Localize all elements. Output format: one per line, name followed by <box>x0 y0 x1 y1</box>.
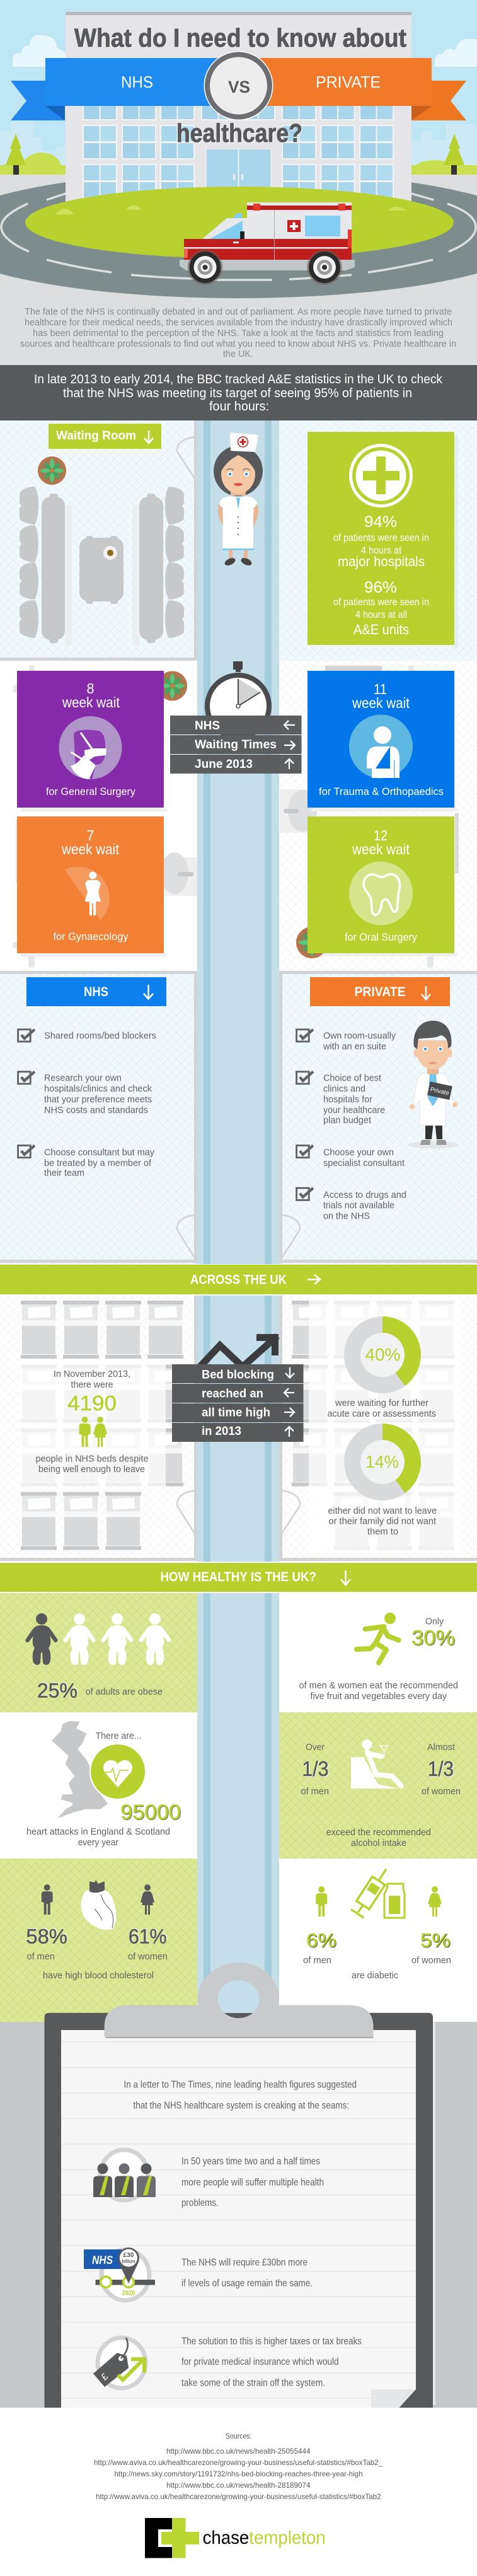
item: 30bn funding gap <box>84 2248 313 2300</box>
statistic: 4190 people in NHS beds: people in NHS beds despite <box>35 1453 149 1464</box>
statistic: A&E units: 96% <box>364 579 397 596</box>
letter intro <box>124 2079 357 2111</box>
item: 30bn funding gap: if levels of usage remain the same. <box>181 2278 313 2289</box>
band: across the UK: ACROSS THE UK <box>190 1272 287 1287</box>
item: research hospitals: Research your own <box>44 1073 122 1084</box>
statistic: alcohol intake <box>301 1739 461 1848</box>
card: general surgery wait: week wait <box>62 694 120 711</box>
statistic: 4190 people in NHS beds: 4190 <box>67 1391 117 1415</box>
clouds <box>13 35 477 67</box>
card: A&E performance <box>307 432 458 648</box>
statistic: major hospitals <box>333 513 429 569</box>
signpost: bed blocking: reached an <box>202 1387 263 1401</box>
footer sources: http://www.aviva.co.uk/healthcarezone/growing-your-business/useful-statistics/#boxTab2_ <box>94 2458 382 2467</box>
column: women <box>422 1742 461 1797</box>
logo: chase templeton <box>145 2518 326 2558</box>
label: Private: PRIVATE <box>316 73 381 91</box>
item: choice of clinics: clinics and <box>323 1084 365 1094</box>
footer sources: Sources: <box>226 2432 252 2440</box>
floor backgrounds <box>0 421 477 1561</box>
item: research hospitals <box>18 1072 152 1116</box>
signpost: NHS waiting times June 2013: Waiting Times <box>195 738 277 751</box>
donut chart: 40% <box>328 1316 436 1419</box>
statistic: major hospitals: 94% <box>364 513 397 531</box>
item: own room: with an en suite <box>323 1041 386 1052</box>
icon: NHS timeline with pin: 2020 <box>122 2290 135 2297</box>
header scene: hospital and ambulance <box>0 0 477 365</box>
signpost: bed blocking: Bed blocking <box>202 1368 274 1382</box>
statistic: heart attacks <box>26 1721 181 1848</box>
caption <box>328 1398 436 1419</box>
item: multiple health problems: problems. <box>181 2198 219 2208</box>
statistic: A&E units: 4 hours at all <box>355 610 407 620</box>
heading: waiting room <box>49 424 161 449</box>
card: oral surgery wait: 12 <box>374 827 388 844</box>
statistic: 4190 people in NHS beds <box>35 1369 149 1475</box>
donut chart: 14%: 14% <box>365 1452 399 1471</box>
arrow: rising trend <box>200 1334 279 1367</box>
statistic: diabetes: 5% <box>420 1929 451 1951</box>
icon: woman <box>428 1886 442 1917</box>
icon: syringe and insulin bottle <box>351 1865 405 1918</box>
item: own room: Own room-usually <box>323 1030 396 1041</box>
card: oral surgery wait <box>307 816 454 953</box>
icon: person drinking in chair <box>351 1739 401 1789</box>
statistic: five a day: of men & women eat the recommended <box>299 1680 458 1691</box>
paper curl <box>371 2389 416 2408</box>
dark band: BBC statistics intro: In late 2013 to early 2014, the BBC tracked A&E statistics in the UK to check <box>34 373 443 386</box>
item: taxes and tax breaks: take some of the strain off the system. <box>181 2378 325 2388</box>
caption: or their family did not want <box>329 1516 437 1527</box>
vs badge <box>204 51 273 120</box>
statistic: high cholesterol: of women <box>128 1951 168 1962</box>
statistic: diabetes <box>303 1865 451 1981</box>
item: 30bn funding gap: The NHS will require £30bn more <box>181 2257 307 2268</box>
card: trauma and orthopaedics wait: 11 <box>374 681 387 697</box>
panel: clipboard letter <box>0 1963 477 2408</box>
icon: medical cross <box>349 444 413 508</box>
clip <box>105 1963 373 2038</box>
icon: anatomical heart <box>81 1880 116 1930</box>
item: choice of clinics <box>297 1072 385 1126</box>
title banner: NHS vs Private <box>11 51 466 120</box>
icon: price tag and arrow: £ <box>99 2371 111 2382</box>
footer sources: http://www.aviva.co.uk/healthcarezone/growing-your-business/useful-statistics/#boxTab2 <box>96 2492 381 2501</box>
icon: NHS timeline with pin: billion <box>122 2258 135 2265</box>
stopwatch <box>205 661 272 740</box>
intro paragraph <box>20 306 456 359</box>
statistic: high cholesterol: of men <box>26 1951 55 1962</box>
icon: NHS timeline with pin: £30 <box>124 2252 134 2259</box>
door swings <box>177 1215 300 1260</box>
skyline <box>0 120 477 175</box>
letter intro: In a letter to The Times, nine leading health figures suggested <box>124 2079 357 2091</box>
statistic: 4190 people in NHS beds: In November 2013, <box>54 1369 130 1379</box>
card: gynaecology wait: week wait <box>61 841 120 857</box>
column: men: of men <box>301 1786 329 1797</box>
statistic: alcohol intake: alcohol intake <box>351 1838 406 1848</box>
card: general surgery wait <box>17 671 164 808</box>
band: how healthy is the UK: HOW HEALTHY IS THE UK? <box>160 1570 316 1584</box>
item: choose consultant: their team <box>44 1168 84 1178</box>
icon: UK map <box>52 1721 108 1818</box>
icon: price tag and arrow <box>93 2338 146 2388</box>
lined paper <box>61 2030 416 2408</box>
icon: obese figures <box>25 1613 171 1665</box>
statistic: diabetes: are diabetic <box>352 1970 398 1981</box>
icon: surgeon <box>59 716 122 779</box>
name badge: Private <box>430 1086 450 1097</box>
building <box>66 12 411 214</box>
statistic: diabetes: 6% <box>306 1929 336 1951</box>
item: drugs and trials: Access to drugs and <box>323 1190 406 1200</box>
label: NHS: NHS <box>121 73 153 91</box>
item: multiple health problems: In 50 years time two and a half times <box>181 2156 320 2167</box>
decorative treatment room fixtures <box>13 665 459 968</box>
statistic: A&E units: A&E units <box>353 622 409 637</box>
dark band: BBC statistics intro: four hours: <box>209 400 269 414</box>
signpost: bed blocking <box>172 1364 304 1442</box>
statistic: major hospitals: major hospitals <box>338 554 425 569</box>
panel: waiting room <box>20 424 196 646</box>
intro paragraph: the UK. <box>223 349 253 359</box>
statistic: heart attacks: every year <box>78 1837 118 1848</box>
caption <box>328 1506 437 1537</box>
statistic: diabetes: of men <box>303 1955 331 1966</box>
column: men: 1/3 <box>302 1757 329 1780</box>
caption: them to <box>367 1526 398 1537</box>
item: choose consultant: be treated by a member of <box>44 1158 152 1169</box>
signpost: bed blocking: all time high <box>202 1406 270 1420</box>
panel: NHS checklist <box>18 977 166 1178</box>
card: general surgery wait: 8 <box>87 680 95 697</box>
statistic: A&E units <box>333 579 429 637</box>
statistic: five a day <box>299 1613 458 1702</box>
icon: plant by surgery card <box>158 671 187 701</box>
item: choice of clinics: Choice of best <box>323 1073 382 1084</box>
item: taxes and tax breaks: for private medical insurance which would <box>181 2357 339 2367</box>
heading: private: PRIVATE <box>354 985 406 999</box>
dark band: BBC statistics intro <box>0 365 477 421</box>
panel: bed grid <box>20 1297 460 1553</box>
icon: tooth <box>349 861 413 925</box>
item: shared rooms: Shared rooms/bed blockers <box>44 1030 156 1041</box>
intro paragraph: healthcare for their medical needs, the services available from the industry have drastically improved which <box>25 317 452 328</box>
column: women: 1/3 <box>428 1757 454 1780</box>
health grid backgrounds <box>0 1592 477 2022</box>
column: women: of women <box>422 1786 461 1797</box>
card: trauma and orthopaedics wait <box>307 671 454 808</box>
title: What do I need to know about <box>74 23 406 52</box>
icon: man <box>316 1886 327 1917</box>
item: choose consultant: Choose consultant but may <box>44 1147 154 1158</box>
ambulance <box>180 202 355 285</box>
column: women: Almost <box>427 1742 456 1753</box>
item: specialist consultant: Choose your own <box>323 1147 394 1158</box>
nurse illustration <box>214 432 263 567</box>
heading: waiting room: Waiting Room <box>56 429 136 443</box>
statistic: diabetes: of women <box>411 1955 451 1966</box>
statistic: high cholesterol <box>26 1880 168 1981</box>
logo: chase templeton: chasetempleton <box>203 2527 326 2548</box>
icon: potted plant <box>38 456 66 485</box>
item: drugs and trials: on the NHS <box>323 1210 370 1221</box>
item: drugs and trials <box>297 1188 406 1221</box>
item: research hospitals: NHS costs and standards <box>44 1105 148 1116</box>
orange ribbon <box>255 58 466 120</box>
vs badge: VS <box>228 78 250 96</box>
icon: man <box>42 1884 53 1915</box>
footer sources <box>94 2432 382 2501</box>
caption: acute care or assessments <box>328 1408 436 1419</box>
statistic: heart attacks: heart attacks in England & Scotland <box>26 1826 170 1837</box>
card: gynaecology wait: for Gynaecology <box>53 931 129 943</box>
windows <box>83 86 394 199</box>
card: gynaecology wait: 7 <box>87 827 95 844</box>
statistic: high cholesterol: 58% <box>26 1925 67 1948</box>
icon: runner <box>357 1613 398 1663</box>
caption: were waiting for further <box>335 1398 428 1408</box>
statistic: high cholesterol: have high blood cholesterol <box>43 1970 154 1981</box>
statistic: high cholesterol: 61% <box>129 1925 167 1948</box>
door swing <box>177 437 196 480</box>
item: own room <box>297 1030 396 1052</box>
column: men <box>301 1742 329 1797</box>
item: choose consultant <box>18 1146 154 1178</box>
card: trauma and orthopaedics wait: week wait <box>352 695 410 711</box>
title <box>74 23 406 148</box>
statistic: five a day: five fruit and vegetables every day <box>310 1691 447 1702</box>
icon: man and woman <box>79 1417 107 1447</box>
item: choice of clinics: your healthcare <box>323 1105 385 1116</box>
caption: either did not want to leave <box>328 1506 437 1516</box>
donut chart: 14% <box>328 1424 437 1537</box>
card: general surgery wait: for General Surgery <box>46 786 135 798</box>
item: multiple health problems: more people will suffer multiple health <box>181 2178 324 2188</box>
statistic: 4190 people in NHS beds: being well enough to leave <box>38 1464 145 1475</box>
statistic: major hospitals: 4 hours at <box>361 545 402 556</box>
item: taxes and tax breaks <box>93 2336 362 2388</box>
door swings <box>177 1490 300 1536</box>
intro paragraph: sources and healthcare professionals to find out what you need to know about NHS vs. Private healthcare in <box>20 339 456 349</box>
statistic: heart attacks: 95000 <box>120 1801 181 1823</box>
icon: heart with pulse <box>89 1743 146 1800</box>
waiting room furniture <box>20 487 184 646</box>
column: men: Over <box>306 1742 325 1753</box>
statistic: alcohol intake: exceed the recommended <box>326 1827 431 1838</box>
lawn and hedges <box>25 187 454 258</box>
signpost: NHS waiting times June 2013: NHS <box>195 719 220 733</box>
statistic: obesity: of adults are obese <box>86 1686 163 1697</box>
clipboard board <box>44 2013 433 2408</box>
bushes and trees behind building <box>0 134 477 185</box>
item: multiple health problems <box>93 2150 324 2208</box>
item: specialist consultant <box>297 1146 405 1169</box>
card: oral surgery wait: week wait <box>352 841 410 857</box>
card: trauma and orthopaedics wait: for Trauma & Orthopaedics <box>319 786 444 798</box>
icon: NHS timeline with pin <box>84 2248 155 2300</box>
signpost: NHS waiting times June 2013 <box>170 716 301 774</box>
band: across the UK <box>0 1265 477 1294</box>
intro paragraph: The fate of the NHS is continually debated in and out of parliament. As more people have turned to private <box>25 306 452 317</box>
signpost: bed blocking: in 2013 <box>202 1425 241 1438</box>
statistic: 4190 people in NHS beds: there were <box>71 1379 113 1390</box>
item: research hospitals: that your preference meets <box>44 1094 152 1105</box>
footer sources: http://www.bbc.co.uk/news/health-28189074 <box>166 2481 311 2490</box>
icon: patient with sling <box>349 715 413 778</box>
item: specialist consultant: specialist consultant <box>323 1158 405 1169</box>
icon: woman <box>64 867 110 920</box>
dark band: BBC statistics intro: that the NHS was meeting its target of seeing 95% of patients in <box>63 386 412 400</box>
footer sources: http://news.sky.com/story/1191732/nhs-bed-blocking-reaches-three-year-high <box>115 2469 363 2478</box>
card: gynaecology wait <box>17 816 164 953</box>
road <box>0 171 477 298</box>
icon: woman <box>141 1884 154 1915</box>
item: drugs and trials: trials not available <box>323 1200 394 1210</box>
statistic: major hospitals: of patients were seen in <box>333 533 429 543</box>
band: how healthy is the UK <box>0 1563 477 1592</box>
heading: NHS: NHS <box>84 985 108 999</box>
statistic: obesity <box>25 1613 171 1702</box>
title: healthcare? <box>176 119 302 148</box>
icon: three people <box>93 2150 156 2200</box>
statistic: five a day: 30% <box>411 1626 455 1649</box>
statistic: heart attacks: There are... <box>96 1731 141 1741</box>
intro paragraph: has been detrimental to the perception of the NHS. Take a look at the facts and statistics from leading <box>33 328 444 339</box>
item: choice of clinics: plan budget <box>323 1115 372 1126</box>
doctor illustration <box>408 1021 459 1149</box>
name badge <box>427 1082 452 1100</box>
footer sources: http://www.bbc.co.uk/news/health-25055444 <box>166 2447 311 2456</box>
item: taxes and tax breaks: The solution to this is higher taxes or tax breaks <box>181 2336 362 2347</box>
heading: NHS <box>26 977 166 1006</box>
blue ribbon <box>11 58 225 120</box>
statistic: obesity: 25% <box>37 1680 78 1702</box>
heading: private <box>310 977 450 1006</box>
card: oral surgery wait: for Oral Surgery <box>345 931 417 943</box>
central corridor <box>197 421 279 2022</box>
icon: NHS timeline with pin: NHS <box>92 2254 113 2266</box>
statistic: five a day: Only <box>425 1616 444 1627</box>
signpost: NHS waiting times June 2013: June 2013 <box>195 758 253 771</box>
item: research hospitals: hospitals/clinics and check <box>44 1084 152 1094</box>
icon: plant by oral surgery card <box>296 927 328 958</box>
item: choice of clinics: hospitals for <box>323 1094 372 1105</box>
letter intro: that the NHS healthcare system is creaking at the seams: <box>134 2101 349 2111</box>
door <box>206 149 271 213</box>
statistic: A&E units: of patients were seen in <box>333 597 429 608</box>
panel: private checklist <box>297 977 459 1221</box>
donut chart: 40%: 40% <box>365 1345 401 1364</box>
